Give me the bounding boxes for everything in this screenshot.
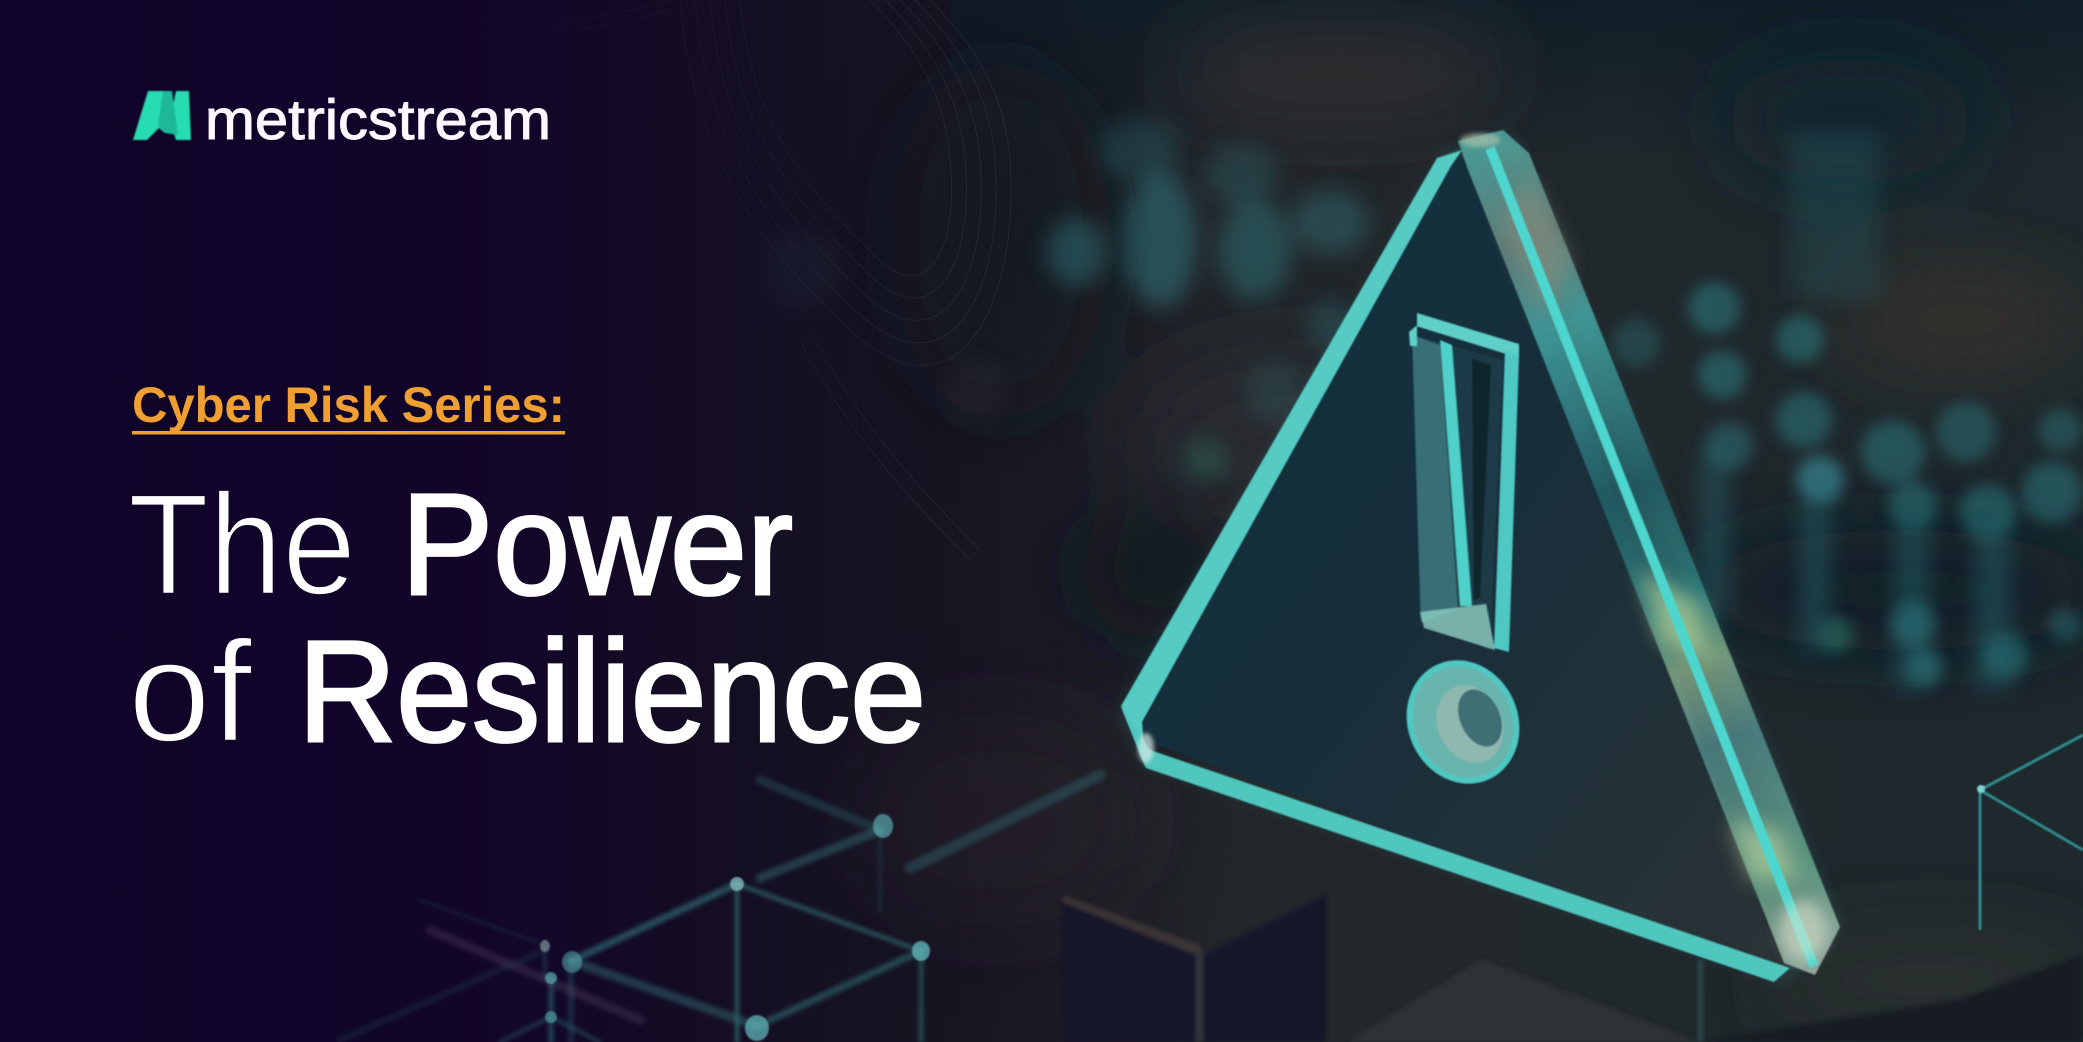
- warning triangle: [1121, 130, 1840, 982]
- title line 1: [128, 464, 793, 625]
- bright teal core line on right edge: [1490, 148, 1814, 966]
- title line 1: Power: [401, 464, 793, 625]
- title line 2: of: [128, 611, 253, 772]
- glass reflections: [1500, 180, 1800, 880]
- title: [128, 464, 926, 772]
- corner highlight: [1138, 733, 1154, 763]
- wireframe cubes lower left: [340, 775, 1100, 1042]
- exclamation dot: [1391, 646, 1535, 798]
- title line 2: Resilience: [298, 611, 926, 772]
- logo: [133, 88, 551, 152]
- dark plinth blocks at bottom: [1063, 895, 2083, 1042]
- title line 1: The: [128, 464, 356, 625]
- exclamation bottom: [1420, 604, 1495, 650]
- apex highlight: [1460, 133, 1500, 147]
- triangle glow: [1125, 140, 1835, 975]
- wordmark: metricstream: [205, 88, 551, 152]
- wireframe cube lower right: [1977, 735, 2083, 930]
- exclamation top bar: [1409, 313, 1519, 358]
- exclamation mark: [1409, 313, 1519, 652]
- right glass edge: [1458, 130, 1840, 975]
- left front edge: [1121, 150, 1462, 768]
- exclamation left strip: [1440, 340, 1472, 606]
- bottom front edge: [1121, 706, 1790, 982]
- bokeh lights right of triangle: [1612, 282, 2082, 685]
- series label: Cyber Risk Series:: [132, 377, 565, 433]
- triangle glass face: [1130, 150, 1785, 975]
- fine contour wave lines: [340, 0, 1011, 560]
- exclamation right strip: [1494, 350, 1519, 652]
- bokeh lights upper left of triangle: [760, 118, 1368, 482]
- exclamation glass body: [1412, 335, 1503, 650]
- blurred light columns far right: [1700, 130, 2011, 690]
- bottom right highlight: [1779, 900, 1827, 960]
- icon: M mark: [133, 91, 191, 140]
